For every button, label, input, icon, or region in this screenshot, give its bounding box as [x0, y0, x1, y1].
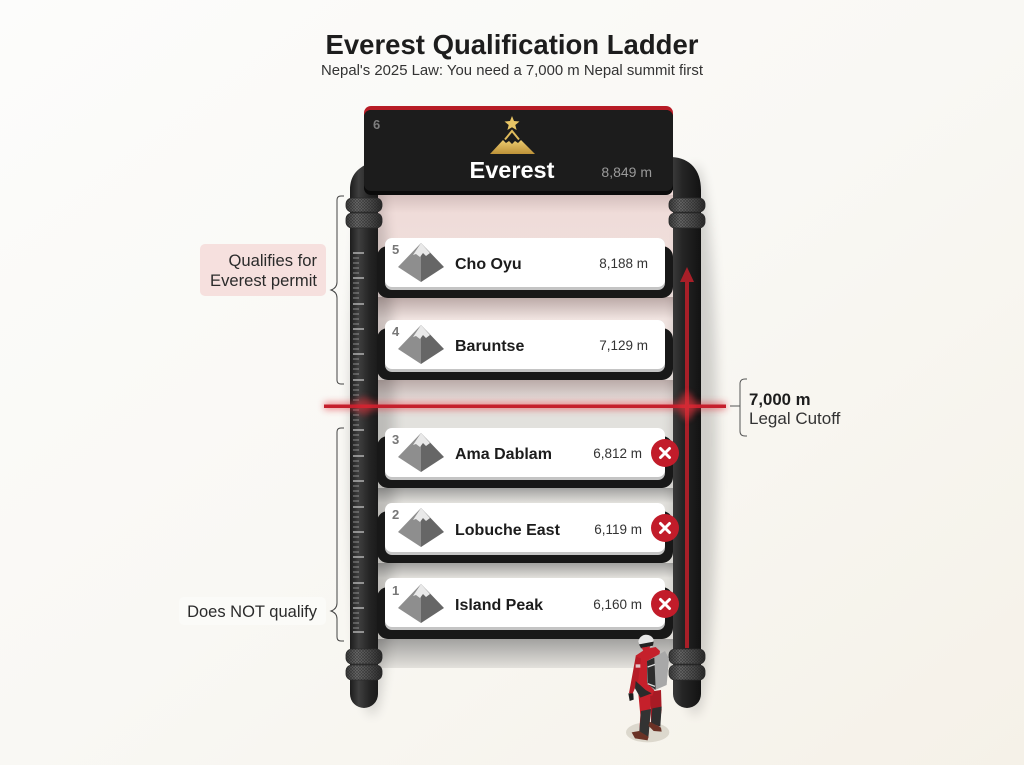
icon: fail mark	[651, 439, 679, 467]
rung 3: Ama Dablam: Ama Dablam	[455, 446, 552, 463]
altitude scale on left rail	[353, 253, 364, 632]
pipe collars	[346, 198, 705, 680]
bracket: qualifies	[331, 196, 344, 384]
7,000 m cutoff line	[324, 392, 726, 420]
rung 5: Cho Oyu: Cho Oyu	[455, 256, 522, 273]
rung 4: Baruntse: 7,129 m	[599, 338, 648, 353]
label: legal cutoff: Legal Cutoff	[749, 409, 841, 428]
icon: gold mountain with star	[490, 116, 535, 154]
label: legal cutoff	[749, 390, 841, 428]
rung 4: Baruntse	[377, 320, 673, 380]
rung 5: Cho Oyu	[377, 238, 673, 298]
rung 1: Island Peak: 6,160 m	[593, 597, 642, 612]
icon: fail mark	[651, 590, 679, 618]
icon: fail mark	[651, 514, 679, 542]
subtitle: Nepal's 2025 Law: You need a 7,000 m Nepal summit first	[321, 63, 704, 79]
bracket: legal cutoff	[730, 379, 747, 436]
Everest top panel	[364, 106, 673, 195]
rung 1: Island Peak: Island Peak	[455, 597, 543, 614]
upward red arrow	[680, 267, 694, 648]
rung 2: Lobuche East	[377, 503, 679, 563]
rung 2: Lobuche East: Lobuche East	[455, 522, 561, 539]
Everest top panel: 6	[373, 117, 380, 132]
backdrop between rails	[378, 190, 673, 668]
title: Everest Qualification Ladder	[326, 29, 699, 60]
rung 2: Lobuche East: 2	[392, 507, 399, 522]
label: qualifies for Everest permit: Everest permit	[210, 271, 317, 290]
rung 3: Ama Dablam	[377, 428, 679, 488]
rung 1: Island Peak	[377, 578, 679, 639]
label: qualifies for Everest permit	[200, 244, 326, 296]
rung 5: Cho Oyu: 8,188 m	[599, 256, 648, 271]
Everest top panel: Everest	[470, 157, 555, 183]
rung 4: Baruntse: Baruntse	[455, 338, 524, 355]
climber figure	[626, 635, 669, 742]
bracket: does not qualify	[331, 428, 344, 641]
label: does not qualify: Does NOT qualify	[187, 603, 318, 621]
label: qualifies for Everest permit: Qualifies for	[228, 251, 317, 270]
rung 4: Baruntse: 4	[392, 324, 400, 339]
label: does not qualify	[179, 597, 326, 625]
rung 3: Ama Dablam: 6,812 m	[593, 446, 642, 461]
Everest top panel: 8,849 m	[601, 164, 652, 180]
rung 3: Ama Dablam: 3	[392, 432, 399, 447]
label: legal cutoff: 7,000 m	[749, 390, 811, 409]
rung 1: Island Peak: 1	[392, 583, 399, 598]
rung 2: Lobuche East: 6,119 m	[594, 522, 642, 537]
rung 5: Cho Oyu: 5	[392, 242, 399, 257]
ladder rails	[350, 157, 717, 715]
